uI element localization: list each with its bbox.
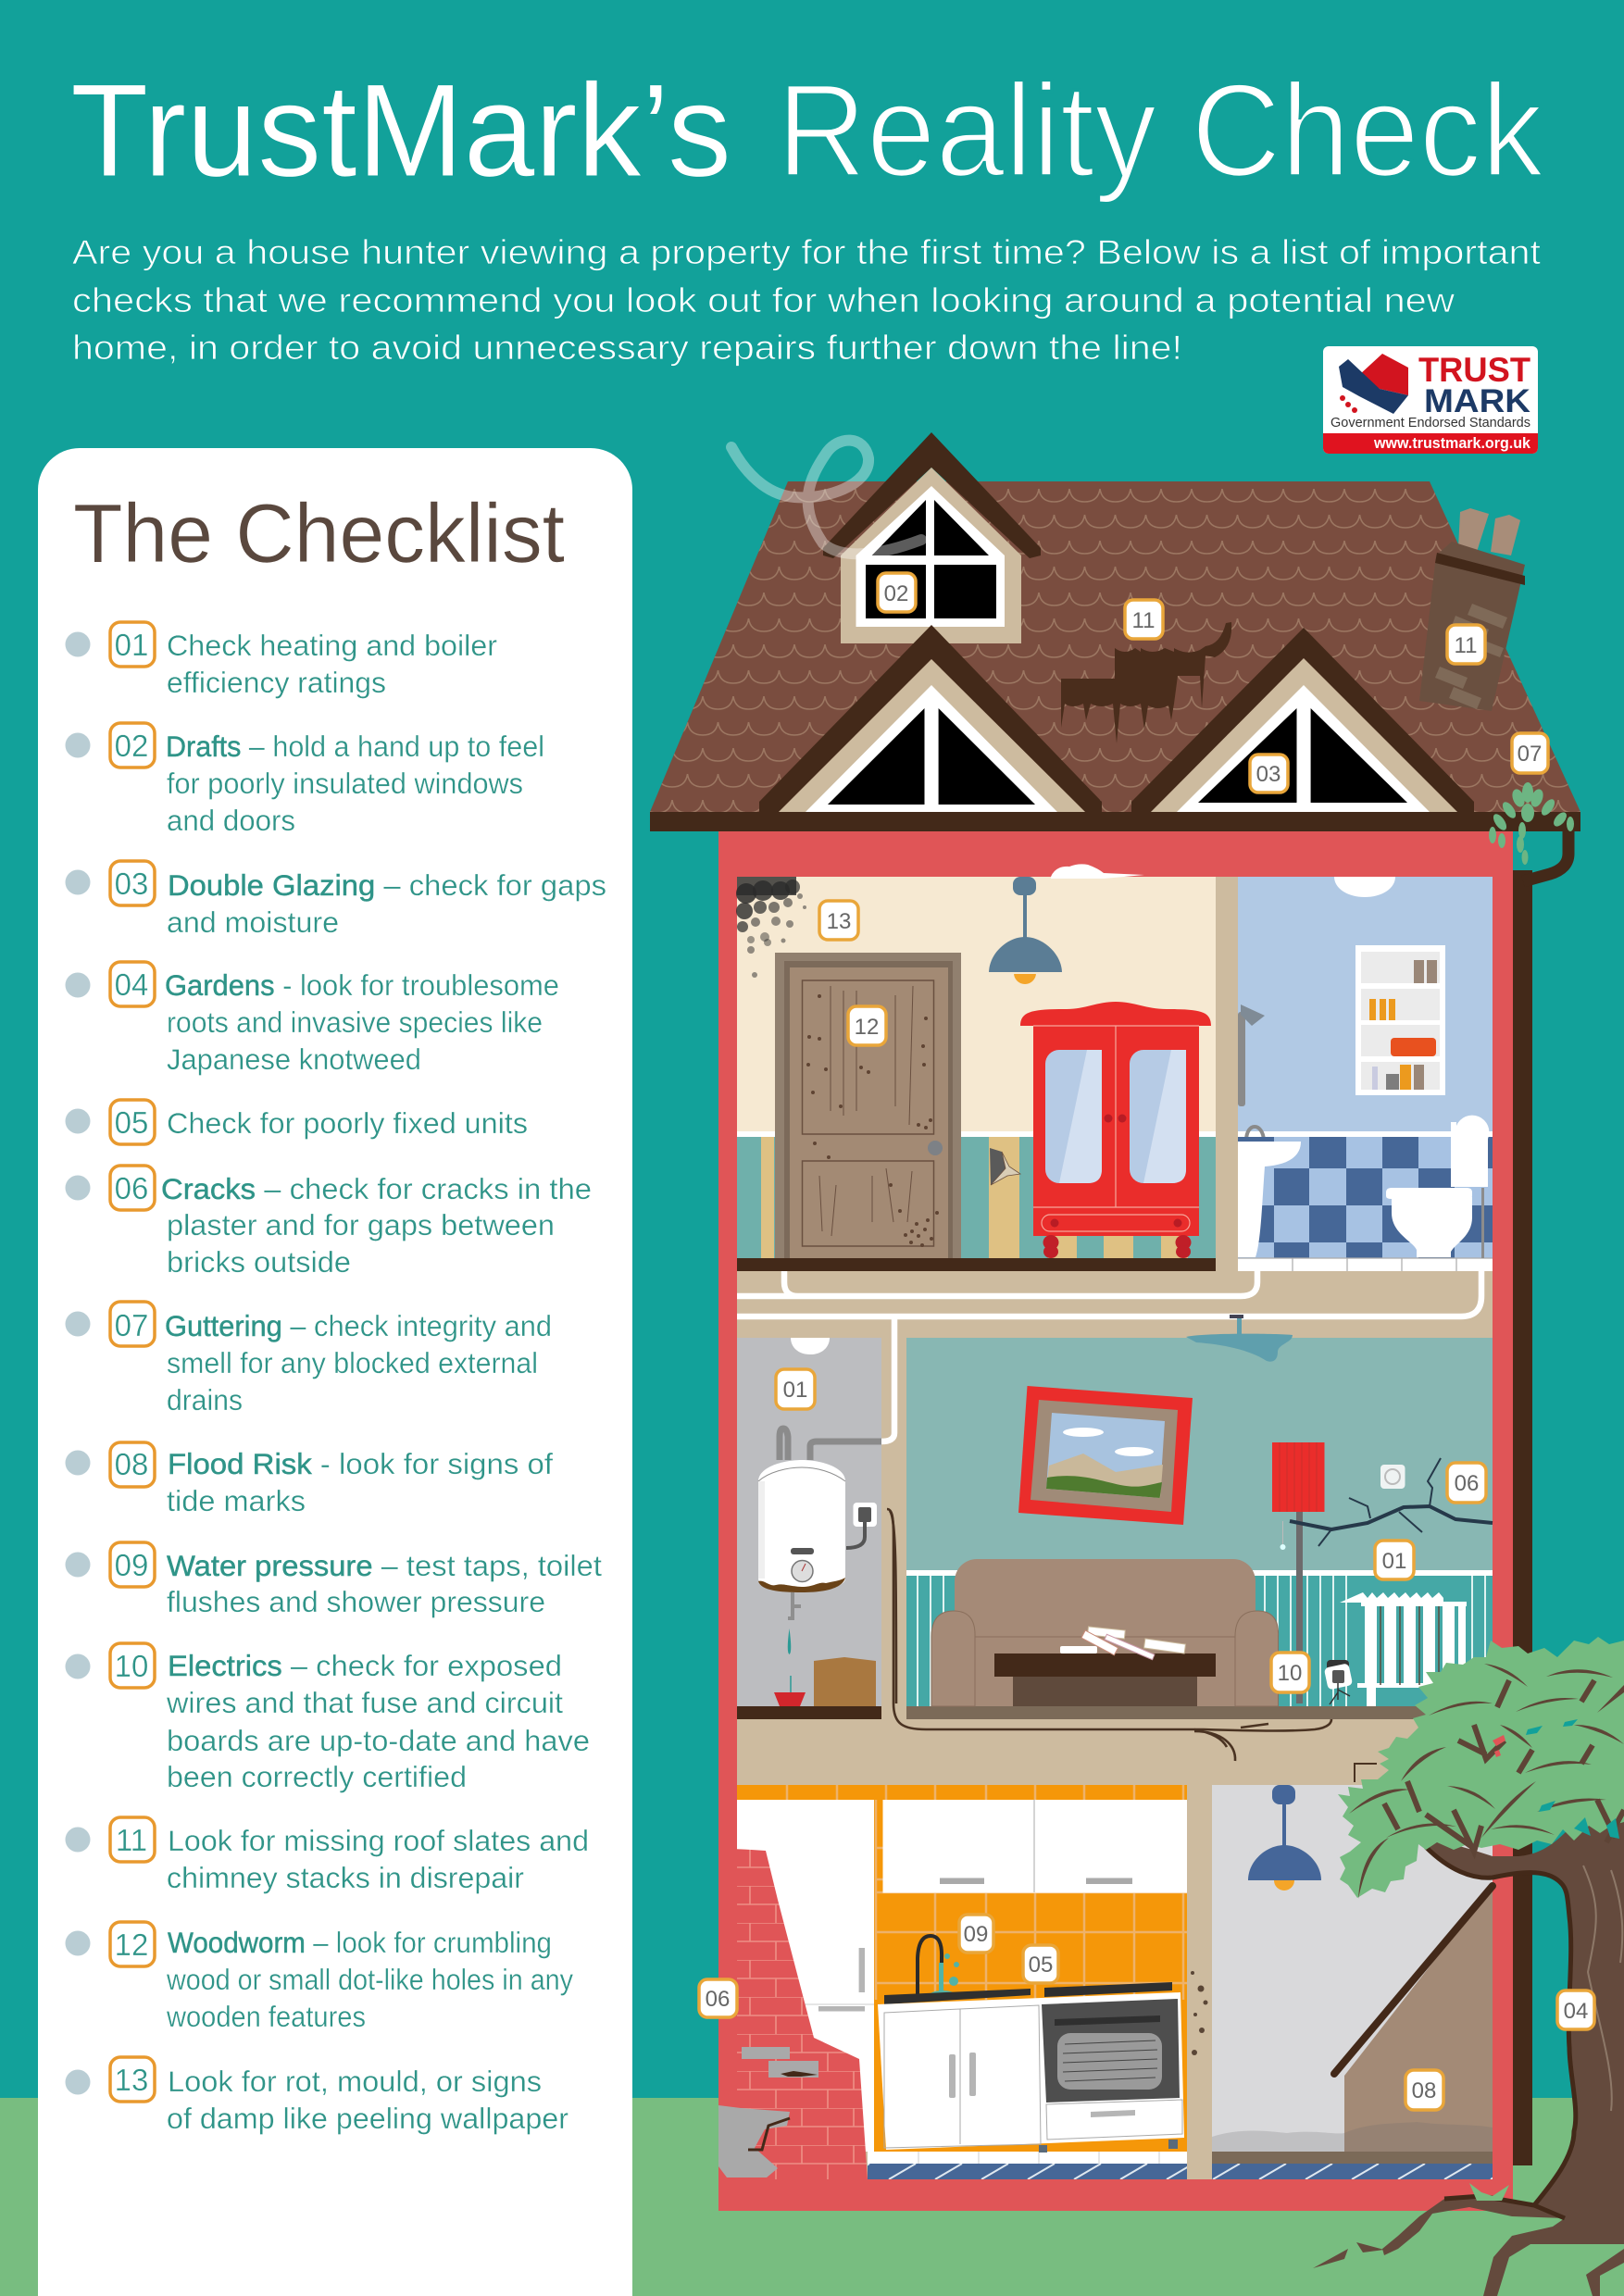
- tag 01 radiator: [1375, 1541, 1414, 1579]
- fascia board: [650, 812, 1580, 831]
- tag 06 crack: 06: [1455, 1471, 1479, 1496]
- tag 04: [1557, 1990, 1594, 2029]
- wall crack: [1290, 1458, 1493, 1546]
- missing slates: [1061, 622, 1231, 743]
- intro paragraph: Are you a house hunter viewing a property for the first time? Below is a list of important: [72, 232, 1542, 271]
- item 06: [65, 1166, 592, 1279]
- broken socket: [1324, 1660, 1353, 1704]
- item 09: [65, 1542, 602, 1618]
- item 04: 04: [115, 967, 148, 1002]
- tilted picture: [1018, 1386, 1193, 1525]
- tag 04: 04: [1564, 1999, 1588, 2024]
- item 10: wires and that fuse and circuit: [166, 1686, 563, 1719]
- TrustMark logo: Government Endorsed Standards: [1330, 415, 1530, 430]
- item 06: Cracks – check for cracks in the: [161, 1172, 592, 1205]
- floor tiles: kitchen: [868, 2152, 1187, 2179]
- fridge: [737, 1800, 874, 2152]
- item 10: been correctly certified: [167, 1760, 467, 1793]
- item 04: Gardens - look for troublesome: [165, 968, 559, 1002]
- item 01: 01: [115, 628, 148, 662]
- item 10: boards are up-to-date and have: [167, 1724, 590, 1757]
- item 06: bricks outside: [167, 1245, 351, 1279]
- title: [70, 57, 1543, 205]
- gutter downpipe: [1523, 829, 1568, 881]
- item 12: 12: [115, 1928, 148, 1962]
- room: bedroom: [736, 877, 1216, 1271]
- item 06: plaster and for gaps between: [167, 1208, 555, 1242]
- tag 12: 12: [855, 1015, 879, 1040]
- tag 08: 08: [1412, 2078, 1436, 2103]
- branch ribs: [1349, 1664, 1624, 1899]
- item 11: chimney stacks in disrepair: [167, 1861, 524, 1894]
- item 05: 05: [115, 1105, 148, 1140]
- tag 02: [878, 573, 916, 612]
- ceiling leak: [1186, 1315, 1293, 1362]
- tag 11 roof: 11: [1132, 608, 1155, 633]
- item 01: efficiency ratings: [167, 666, 386, 699]
- right dormer window: [1131, 628, 1474, 812]
- item 10: Electrics – check for exposed: [168, 1649, 562, 1682]
- toilet: [1386, 1116, 1489, 1258]
- tag 10: 10: [1278, 1661, 1302, 1686]
- floor lamp: [1272, 1442, 1324, 1703]
- boiler pipes: [780, 1429, 881, 1460]
- peeling wallpaper: [990, 1148, 1020, 1185]
- tag 09: 09: [964, 1922, 988, 1947]
- item 07: Guttering – check integrity and: [165, 1309, 552, 1342]
- title: TrustMark’s: [70, 57, 731, 205]
- ceiling lamp: bedroom: [989, 877, 1062, 984]
- intro paragraph: home, in order to avoid unnecessary repairs further down the line!: [72, 328, 1182, 367]
- item 03: 03: [115, 867, 148, 901]
- tag 01 boiler: [776, 1369, 815, 1409]
- panel: checklist: [38, 448, 632, 2296]
- exposed wires under floor: [887, 1509, 1377, 1782]
- item 04: [65, 962, 559, 1076]
- tag 07: 07: [1518, 742, 1542, 767]
- left dormer window: [759, 625, 1102, 812]
- trunk and roots: [1382, 1810, 1624, 2296]
- foliage silhouette: [1338, 1637, 1624, 1898]
- tag 13: [819, 901, 858, 940]
- item 08: tide marks: [167, 1484, 306, 1517]
- item 03: and moisture: [167, 905, 339, 939]
- item 11: Look for missing roof slates and: [168, 1824, 589, 1857]
- tag 06 bricks: [699, 1979, 737, 2017]
- item 13: of damp like peeling wallpaper: [167, 2102, 568, 2135]
- TrustMark logo: MARK: [1424, 383, 1530, 419]
- plaster damage at ceiling: [1051, 864, 1144, 879]
- tilted kitchen units and oven: [878, 1982, 1184, 2152]
- TrustMark logo: TRUST: [1418, 351, 1530, 389]
- tag 06 bricks: 06: [706, 1987, 730, 2012]
- moss in gutter: [1489, 782, 1574, 865]
- item 02: Drafts – hold a hand up to feel: [166, 730, 544, 763]
- item 13: [65, 2057, 568, 2135]
- background: green ground: [0, 2098, 1624, 2296]
- tag 05: 05: [1029, 1953, 1053, 1978]
- mould patch: [736, 877, 806, 978]
- TrustMark logo: [1323, 346, 1538, 454]
- item 01: Check heating and boiler: [167, 629, 497, 662]
- small leaves at wall base: [1469, 2183, 1509, 2201]
- item 07: smell for any blocked external: [167, 1346, 538, 1379]
- item 13: 13: [115, 2063, 148, 2097]
- item 02: for poorly insulated windows: [167, 767, 523, 800]
- room: living room: [906, 1315, 1493, 1719]
- tag 11 chimney: [1447, 625, 1485, 664]
- side drainpipe wall: [1512, 870, 1532, 2165]
- flood tide mark: [1212, 2122, 1493, 2152]
- item 07: 07: [115, 1308, 148, 1342]
- door with woodworm: [775, 953, 961, 1258]
- item 12: wooden features: [166, 2000, 366, 2033]
- floor: hall: [1212, 2152, 1493, 2164]
- item 09: flushes and shower pressure: [167, 1585, 545, 1618]
- item 07: drains: [167, 1383, 243, 1416]
- cardboard box: [814, 1657, 876, 1706]
- tag 05: [1023, 1945, 1058, 1983]
- wardrobe: [1020, 1002, 1211, 1258]
- intro paragraph: checks that we recommend you look out for when looking around a potential new: [72, 281, 1455, 319]
- ceiling light: cupboard: [791, 1338, 830, 1354]
- boiler with rust: [758, 1460, 845, 1592]
- item 07: [65, 1302, 552, 1416]
- tag 11 chimney: 11: [1455, 633, 1477, 658]
- item 11: 11: [116, 1823, 147, 1857]
- item 03: Double Glazing – check for gaps: [168, 868, 606, 902]
- intro paragraph: [72, 232, 1542, 367]
- leaking tap and drip: [774, 1592, 806, 1706]
- tag 13: 13: [827, 909, 851, 934]
- room: boiler cupboard: [737, 1338, 881, 1719]
- sofa: [931, 1559, 1279, 1706]
- item 10: 10: [115, 1649, 148, 1683]
- thermostat: [1380, 1465, 1405, 1489]
- item 01: [65, 622, 497, 699]
- tag 01 boiler: 01: [783, 1378, 807, 1403]
- item 12: Woodworm – look for crumbling: [168, 1926, 552, 1959]
- tag 12: [848, 1006, 886, 1045]
- tag 08: [1405, 2070, 1443, 2110]
- room: kitchen: [718, 1785, 1187, 2179]
- tree: [1313, 1637, 1624, 2296]
- item 10: [65, 1643, 590, 1793]
- item 03: [65, 861, 606, 939]
- plumbing pipes: [737, 1271, 1481, 1441]
- ceiling light: bathroom: [1334, 877, 1395, 897]
- shower: [1238, 1004, 1265, 1106]
- tag 03: 03: [1256, 762, 1280, 787]
- house frame: [718, 824, 1513, 2211]
- damaged leaves: [1526, 1719, 1619, 1839]
- item 02: and doors: [167, 804, 295, 837]
- item 05: Check for poorly fixed units: [167, 1106, 528, 1140]
- TrustMark logo: www.trustmark.org.uk: [1373, 434, 1531, 452]
- checklist heading: The Checklist: [73, 488, 565, 580]
- woodworm holes in partition: [1191, 1971, 1207, 2055]
- sink: [1238, 1127, 1301, 1257]
- item 08: Flood Risk - look for signs of: [168, 1447, 553, 1480]
- branch forks: [1384, 1680, 1624, 1852]
- item 08: 08: [115, 1447, 148, 1481]
- item 09: 09: [115, 1548, 148, 1582]
- tag 07: [1512, 733, 1548, 773]
- stairs: [1344, 1886, 1493, 2152]
- exposed brickwork crack: [718, 1849, 868, 2179]
- coffee table with books: [994, 1627, 1216, 1706]
- radiator: [1340, 1592, 1467, 1706]
- tag 06 crack: [1447, 1463, 1486, 1503]
- room: bathroom: [1238, 877, 1493, 1271]
- item 04: Japanese knotweed: [167, 1042, 421, 1076]
- tag 11 roof: [1125, 600, 1163, 639]
- item 02: 02: [115, 729, 148, 763]
- item 05: [65, 1100, 528, 1144]
- plug socket: boiler: [846, 1503, 877, 1548]
- item 12: wood or small dot-like holes in any: [166, 1963, 573, 1996]
- roof: [650, 432, 1580, 831]
- item 04: roots and invasive species like: [167, 1005, 543, 1039]
- top dormer window: [823, 432, 1041, 643]
- item 06: 06: [115, 1171, 148, 1205]
- chimney: [1419, 508, 1525, 711]
- shelf unit: [1355, 945, 1445, 1095]
- item 02: [65, 723, 544, 837]
- upper cupboards: [883, 1800, 1187, 1893]
- item 11: [65, 1817, 589, 1894]
- tap with spray: [918, 1936, 959, 2000]
- item 13: Look for rot, mould, or signs: [168, 2065, 542, 2098]
- item 09: Water pressure – test taps, toilet: [167, 1549, 602, 1582]
- tag 10: [1271, 1653, 1309, 1692]
- ceiling lamp: hall: [1248, 1785, 1321, 1890]
- room: ground floor hall with stairs: [1212, 1785, 1493, 2179]
- item 08: [65, 1442, 553, 1517]
- title: Reality Check: [777, 57, 1543, 205]
- tag 09: [959, 1915, 993, 1953]
- tag 01 radiator: 01: [1382, 1549, 1406, 1574]
- item 12: [65, 1922, 573, 2033]
- interior wall and ceiling fill: [737, 877, 1493, 2179]
- smoke draft swirl: [731, 441, 921, 554]
- tag 03: [1250, 755, 1288, 792]
- tag 02: 02: [884, 581, 908, 606]
